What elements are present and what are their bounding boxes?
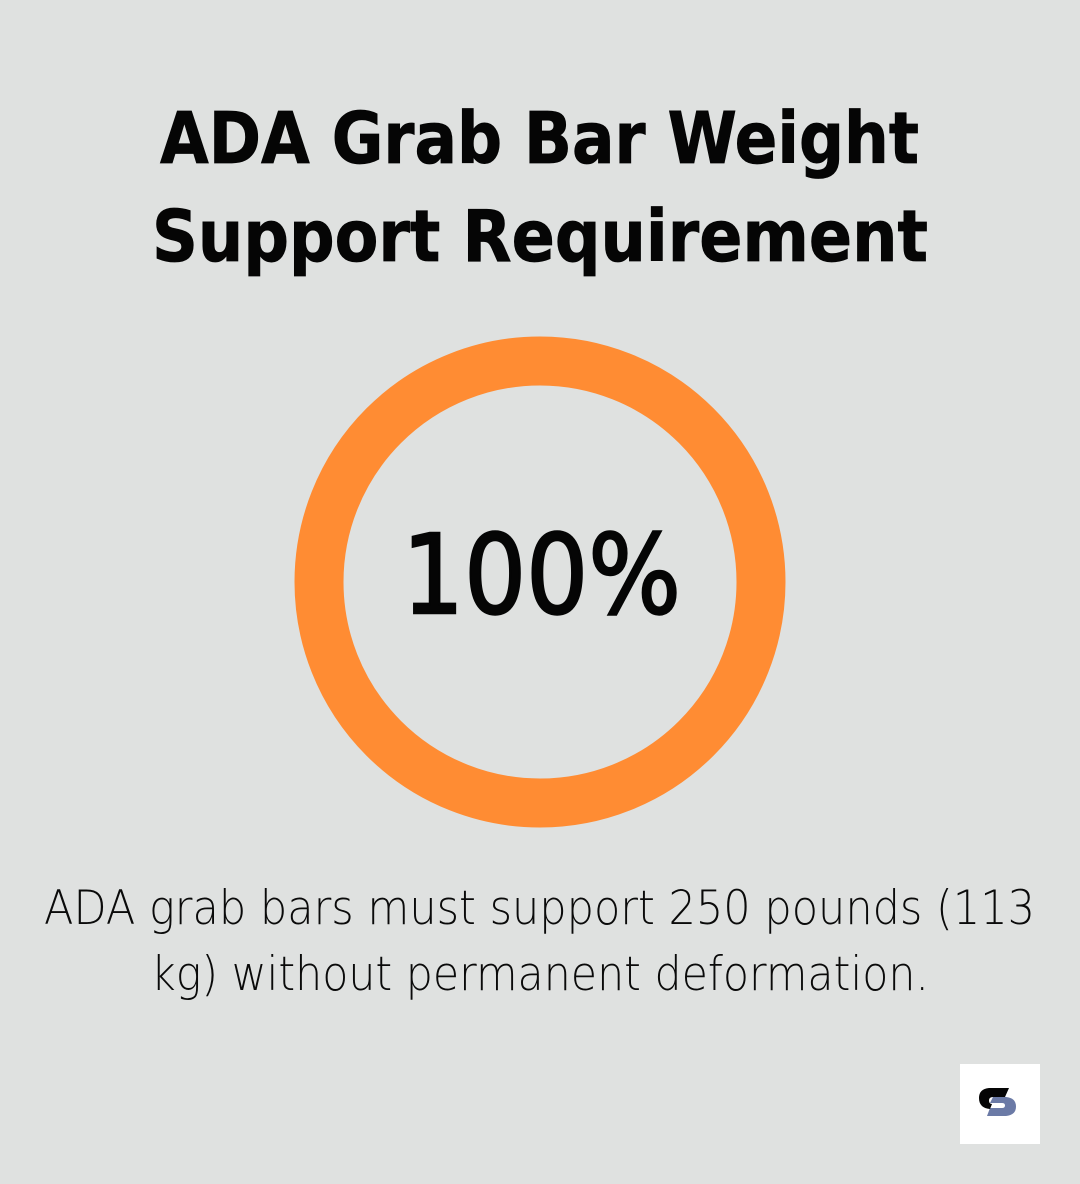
description text bbox=[44, 881, 1035, 1002]
description text: kg) without permanent deformation. bbox=[151, 947, 929, 1002]
title: Support Requirement bbox=[152, 195, 928, 278]
title bbox=[152, 97, 928, 278]
donut chart: 100% ring bbox=[319, 361, 761, 803]
center value: 100%: 100% bbox=[402, 511, 681, 639]
logo badge bbox=[960, 1064, 1040, 1144]
logo mark: black half bbox=[979, 1088, 1009, 1109]
logo mark: blue half bbox=[987, 1097, 1016, 1116]
title: ADA Grab Bar Weight bbox=[160, 97, 919, 180]
